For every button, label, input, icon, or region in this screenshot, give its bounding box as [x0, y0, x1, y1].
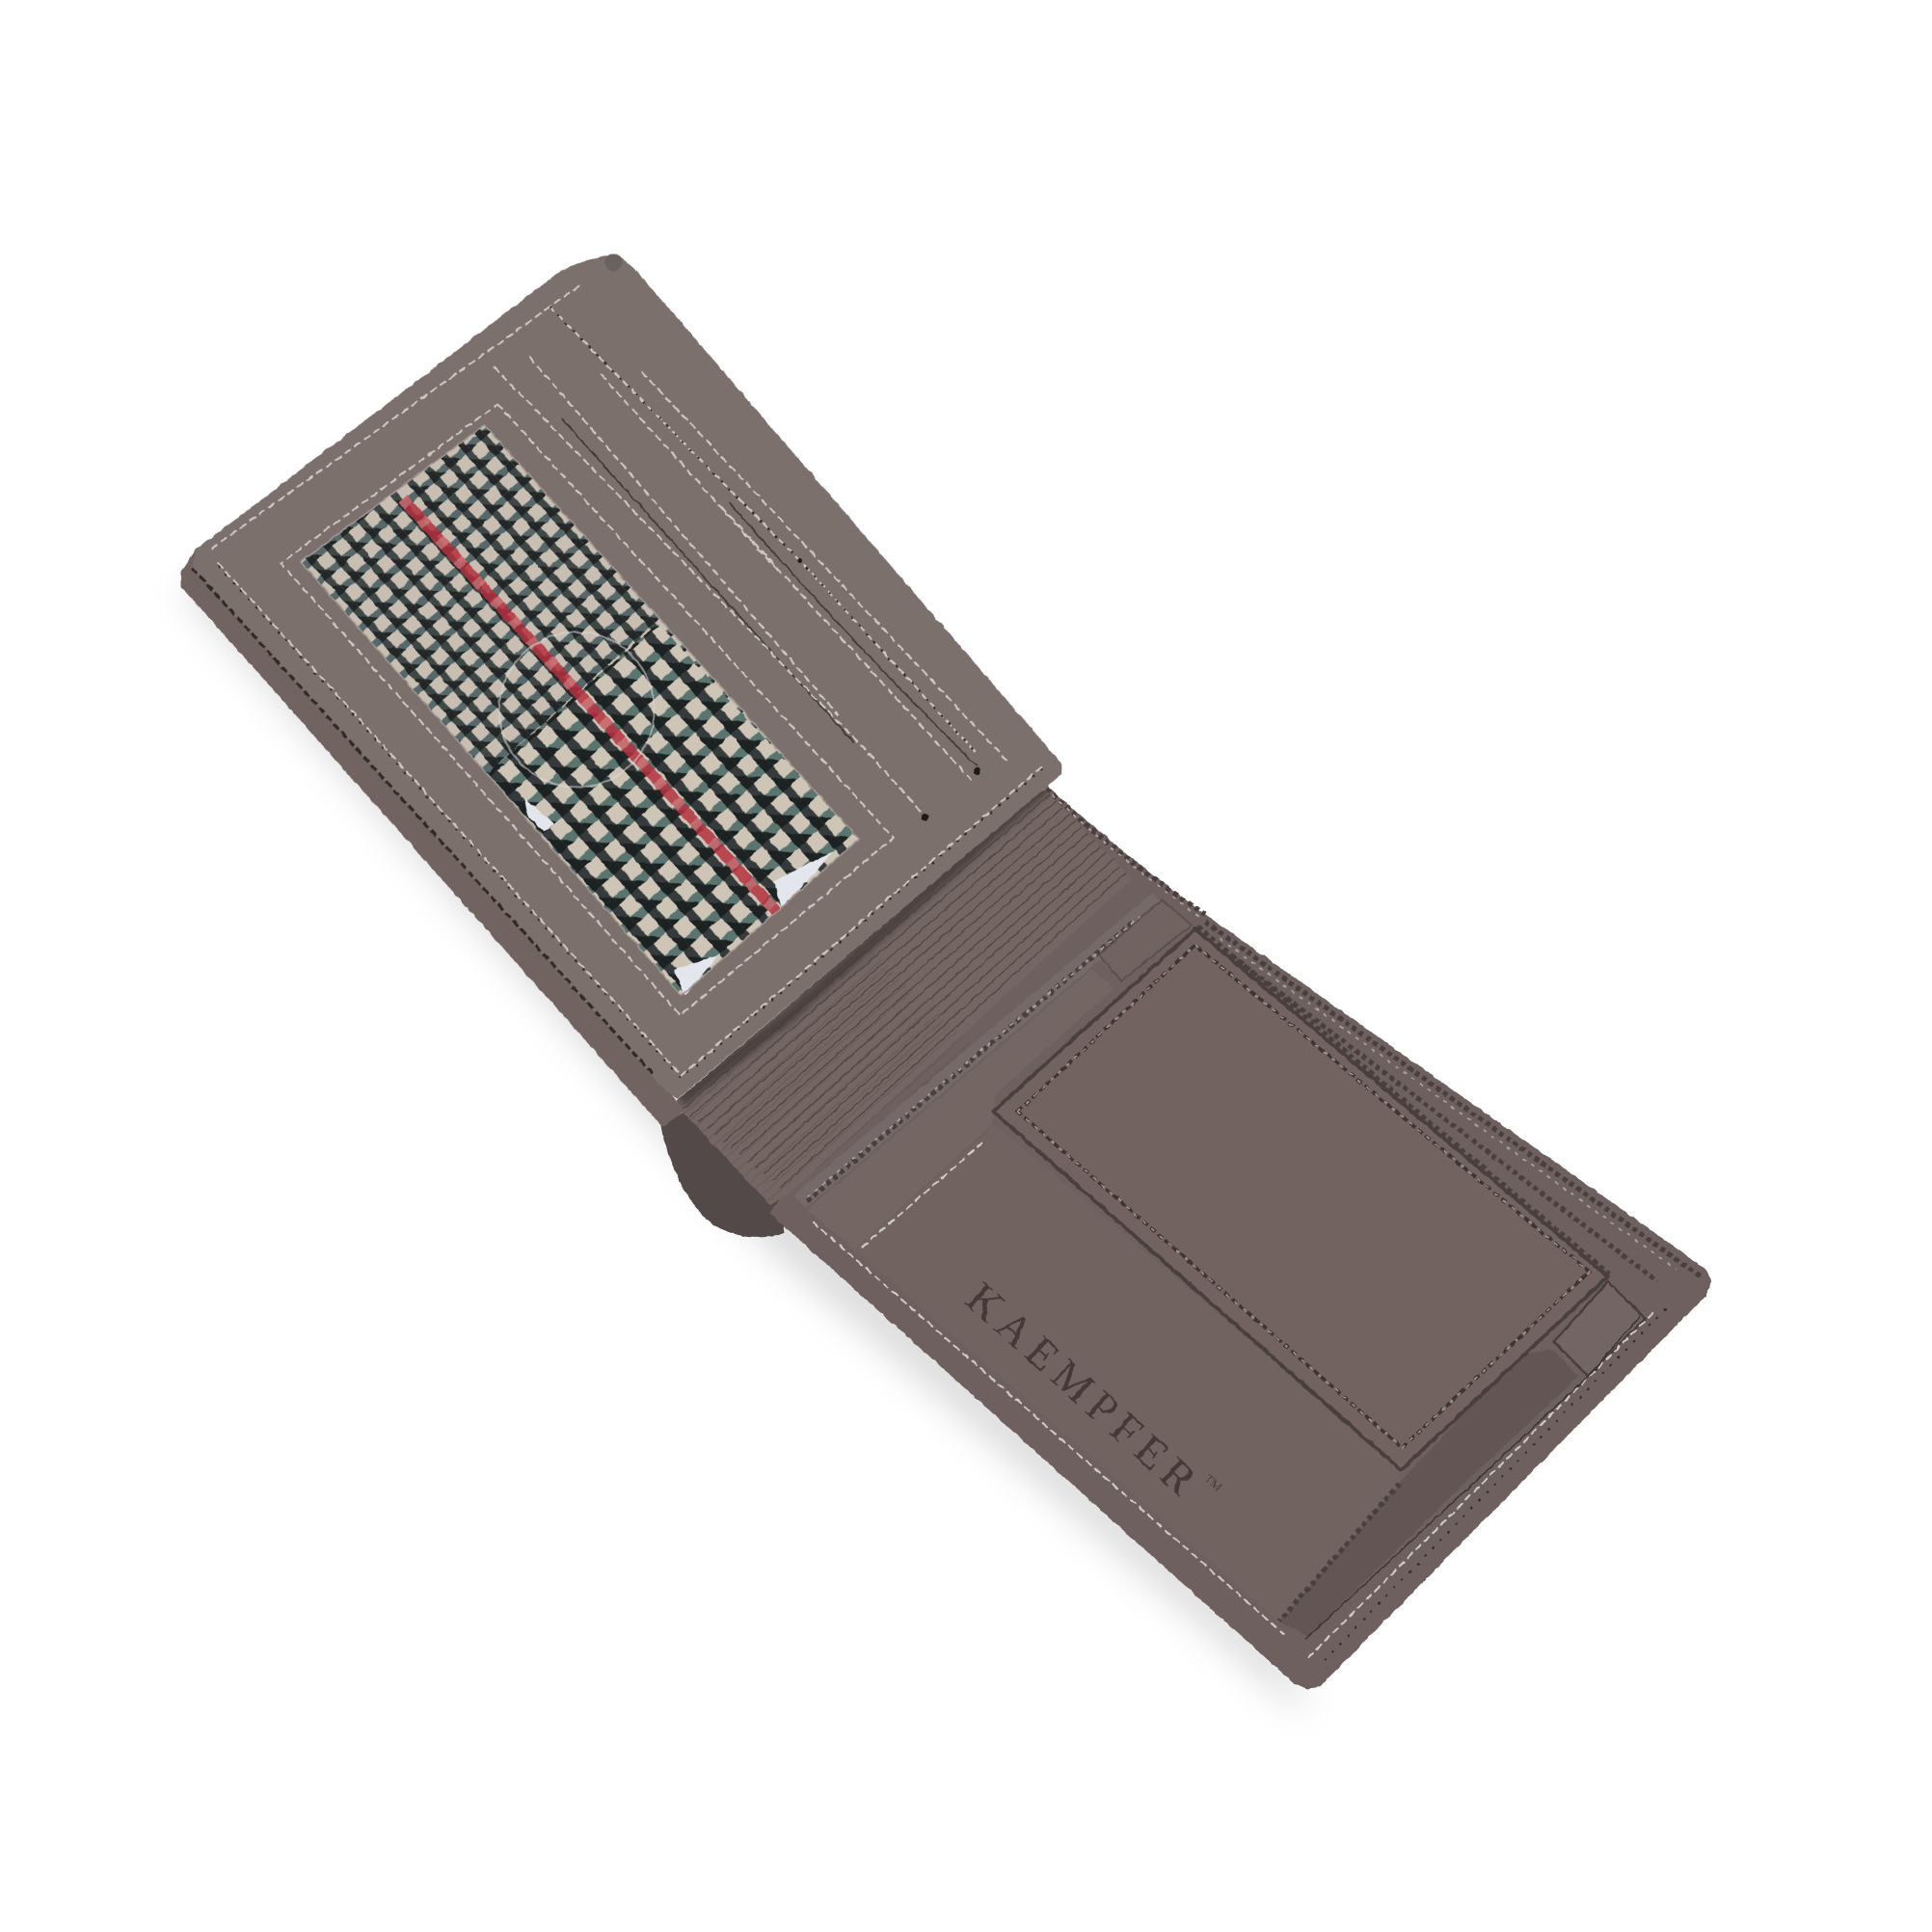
perimeter stitching [212, 286, 1042, 1078]
small slot square [1099, 899, 1192, 980]
upper pocket below card slots [807, 970, 1114, 1249]
lower left perimeter stitching [814, 1222, 1284, 1634]
lower-right recessed coin pocket [1279, 1349, 1578, 1636]
wallet body [181, 254, 1711, 1689]
stitches left of coin flap [863, 1140, 985, 1247]
small recess rectangle [1554, 1281, 1645, 1377]
card slots with ribbed lines [674, 784, 1133, 1205]
wallet spine bulge [660, 1109, 789, 1237]
coin pocket flap [993, 926, 1609, 1470]
flap stitching highlight [1018, 945, 1590, 1448]
brand name: KAEMPFER [957, 1273, 1206, 1504]
large houndstooth pattern [487, 624, 859, 996]
outer rough edge upper right [1047, 789, 1701, 1281]
dark edge seam [192, 568, 653, 1074]
small houndstooth pattern [301, 425, 859, 996]
top corner scuff [605, 254, 622, 271]
flap top edge roughness [1197, 926, 1609, 1275]
flap back rim [181, 550, 684, 1127]
lower panel base [770, 785, 1711, 1689]
rough slot band [799, 899, 1158, 1201]
pocket stitching lower right [1306, 1308, 1666, 1663]
lower wallet panel [770, 785, 1711, 1689]
ribbed area base [674, 789, 1133, 1205]
rib lines [683, 794, 1126, 1188]
stitch holes [797, 558, 980, 820]
branded pocket panel [855, 1125, 1400, 1622]
brand mark KAEMPFER [957, 1273, 1224, 1504]
soft drop shadow [181, 579, 1308, 1706]
trademark: TM [1202, 1472, 1224, 1494]
flap stitching [1018, 945, 1590, 1448]
pocket edge stitching [1279, 1484, 1400, 1622]
coin impression in window [499, 632, 655, 788]
red stripe [403, 499, 776, 912]
flap body [993, 929, 1608, 1470]
flap body [192, 254, 1062, 1099]
cross texture [674, 943, 974, 1205]
window frame stitching [281, 404, 894, 1015]
ID window with houndstooth lining [301, 425, 859, 996]
upper wallet flap [181, 254, 1062, 1127]
slot stitching and slits [495, 307, 1010, 817]
inner shadow along flap edge [680, 784, 1047, 1100]
window edge [301, 425, 859, 996]
product photo: open bifold leather wallet [181, 254, 1712, 1706]
plastic glare highlights [524, 798, 833, 996]
